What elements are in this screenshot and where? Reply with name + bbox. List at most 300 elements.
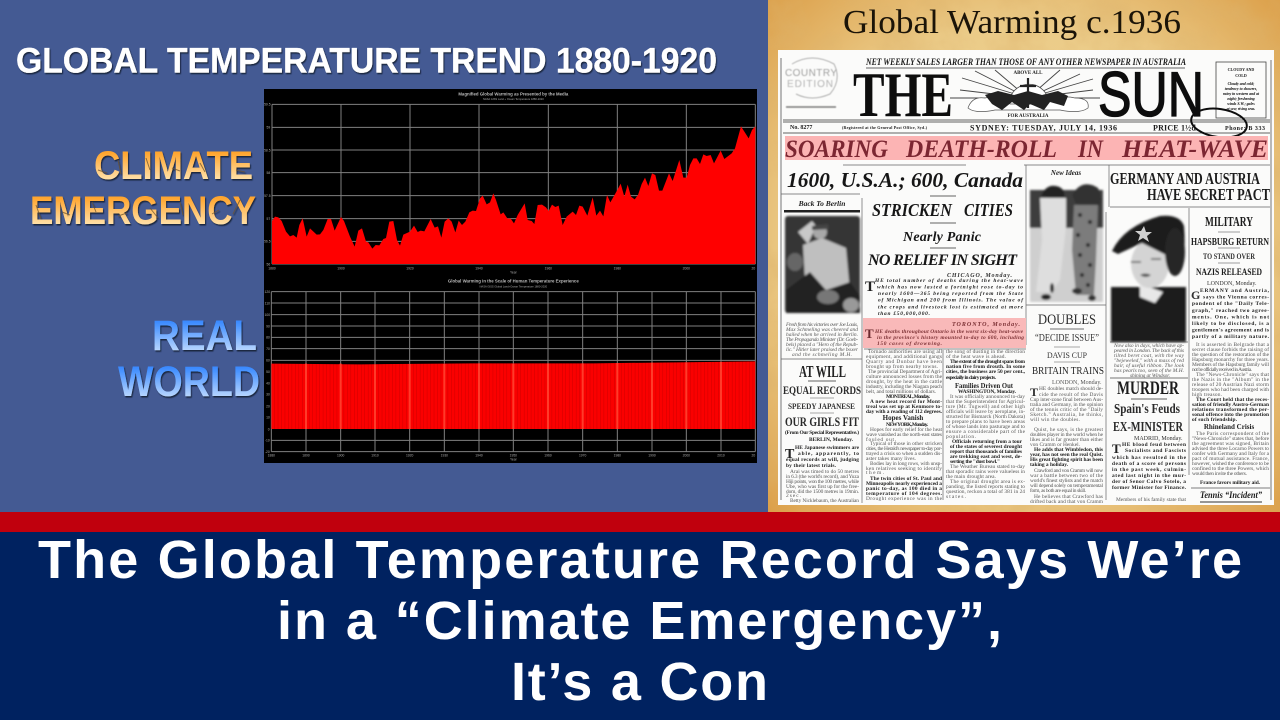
news item: at will equal records: Ube, who was first up for the free- [786,483,859,490]
news item: military hapsburg return: the question of the restoration of the [1192,351,1270,358]
news item: military hapsburg return: secret clause forbids the raising of [1192,346,1269,353]
news column: drought reports: The provincial Department of Agri- [868,368,942,375]
chart title: human scale: NASA GISS Global Land+Ocean Temperature 1880-2020 [480,284,548,288]
news item: military hapsburg return [1191,215,1270,502]
strapline: NET WEEKLY SALES LARGER THAN THOSE OF ANY OTHER NEWSPAPER IN AUSTRALIA [865,57,1186,67]
news column: drought reports: Quarry and Dunbar have been [866,359,942,365]
date line: Phone: B 333 [1225,126,1265,132]
news item: doubles decide issue: BRITAIN TRAINS [1032,366,1104,377]
news item: doubles decide issue: will depend solely on temperamental [1030,483,1104,489]
news item: doubles decide issue: Crawford and von Cramm will now [1034,467,1103,474]
label: real world: REAL [152,312,257,360]
news item: back to berlin photo: bels) placed a "Hero of the Repub- [786,341,858,348]
emblem: sun chariot [950,70,1100,119]
news column: families driven out: cities, the business are 50 per cent., [946,369,1026,375]
news item: military hapsburg return: G [1191,288,1200,302]
news item: stricken cities: T [865,279,875,295]
news item: doubles decide issue [1030,312,1104,505]
news column: drought reports: Drought experience was in the [866,496,943,502]
news item: doubles decide issue: war a battle between two of the [1030,472,1104,479]
axis labels: human scale chart: 2000 [683,454,690,458]
news item: stricken cities: nearly 1600—365 being reported from the State [878,291,1024,297]
news item: doubles decide issue: taking a holiday. [1030,462,1069,468]
news item: at will equal records: 2sec. [786,493,801,499]
news item: military hapsburg return: the agreement was signed, Britain [1192,441,1269,447]
news item: doubles decide issue: of the tennis critic of the "Daily [1030,406,1103,413]
news item: doubles decide issue: Sketch." Australia, he thinks, [1030,412,1104,418]
news item: stricken cities [865,196,1024,317]
news item: at will equal records: T [785,447,795,462]
stamp: country edition [785,58,837,107]
headline: soaring death-roll in heat-wave: IN [1077,136,1104,163]
news column: drought reports: fouled out. [866,436,896,443]
news item: doubles decide issue: will win the doubles. [1030,417,1080,423]
photo: woman in star hat: hair, of useful ribbon. The look [1114,362,1185,369]
chart title: human scale: Global Warming in the Scale of Human Temperature Experience [448,279,579,284]
news item: military hapsburg return: gentlemen's agreement and is [1192,328,1269,334]
axis labels: human scale chart: 90 [266,324,270,328]
news column: drought reports: cities, the Herald's newspaper to-day por- [866,446,942,452]
news item: doubles decide issue: DOUBLES [1038,312,1096,328]
news column: drought reports: Tornado authorities are using all [868,349,942,355]
news column: drought reports: industry, including the Niagara peach [866,384,942,390]
axis labels: magnified chart: 59 [266,126,270,130]
weather box: CLOUDY AND [1228,67,1254,72]
masthead: the sun [781,57,1271,500]
news column: families driven out [946,348,1026,500]
date line: (Registered at the General Post Office, Syd.) [842,125,928,130]
axis labels: human scale chart: 1980 [614,454,621,458]
news column: families driven out: officials will leave by aeroplane, in- [946,408,1025,415]
axis labels: magnified chart: 1960 [545,266,552,270]
news item: doubles decide issue: form, as both are equal in skill. [1030,487,1086,494]
news item: military hapsburg return: of such friendship. [1192,417,1238,423]
photo: woman in star hat: "bejeweled," with a mass of red [1114,357,1184,364]
news item: military hapsburg return: The "News-Chronicle" says that [1196,372,1270,378]
news item: military hapsburg return: LONDON, Monday. [1207,281,1257,287]
circled annotation [1189,105,1249,141]
axis labels: magnified chart: Year [510,271,518,275]
news item: military hapsburg return: high treason. [1192,392,1222,398]
axis labels: magnified chart: 20 [751,266,755,270]
news item: at will equal records: SPEEDY JAPANESE [788,401,855,411]
news item: military hapsburg return: advised the three Locarno Powers to [1192,446,1269,452]
chart title: magnified warming: NASA GISS Land + Ocean Temperature 1880-2020 [483,97,544,101]
news item: military hapsburg return: would then invite the others. [1192,471,1247,477]
photo: woman in star hat: has pearls too, seen of the M.H. [1114,367,1184,374]
axis labels: human scale chart: 1990 [648,454,656,458]
news column: drought reports: Typical of those in other stricken [870,440,942,447]
news column: families driven out: that the Superintendent for Agricul- [946,398,1025,405]
axis labels: magnified chart: 1980 [614,266,621,270]
news item: doubles decide issue: LONDON, Monday. [1052,380,1102,386]
news item: military hapsburg return: graph," reached two agree- [1192,308,1269,314]
panel: global temperature trend background [0,0,768,512]
news item: at will equal records: HE Japanese swimmers are [795,445,860,451]
callout: toronto highlighted paragraph: 150 cases of drowning. [877,341,942,347]
axis labels: magnified chart: 58.5 [264,148,271,152]
news item: military hapsburg return: Hapsburg monarchy for three years. [1192,356,1269,363]
news item: military hapsburg return: Rhineland Crisis [1204,423,1254,431]
weather box: rainy in western and at [1223,92,1260,96]
callout: toronto highlighted paragraph: HE deaths throughout Ontario in the worst six-day heat-wave [874,329,1024,335]
news column: families driven out: that sporadic rains were valueless in [946,469,1025,475]
headline: soaring death-roll in heat-wave: DEATH-ROLL [905,136,1057,163]
news column: families driven out: population. [946,434,976,440]
news item: doubles decide issue: Cup inter-zone final between Aus- [1030,396,1103,403]
news item: military hapsburg return: sation of friendly Austro-German [1192,402,1269,408]
stamp: country edition: COUNTRY [785,68,837,79]
news item: doubles decide issue: von Cramm or Henkel. [1030,442,1080,448]
news column: drought reports: brought up from nearby towns. [866,363,938,370]
news item: murder spain's feuds: in the past week, culmin- [1112,467,1186,473]
axis labels: magnified chart [264,103,755,275]
axis labels: human scale chart: -10 [265,439,270,443]
news column: families driven out: states. [946,494,966,500]
main headline [38,530,1242,712]
axis labels: human scale chart [265,290,755,462]
axis labels: human scale chart: 20 [266,404,270,408]
photo: woman in star hat: shining at Windsor. [1130,373,1170,379]
weather box: tendency to showers, [1225,87,1257,91]
wordmark: SUN: SUN [1098,60,1204,130]
date line [790,124,1265,132]
axis labels: human scale chart: 1950 [510,454,517,458]
title: global temperature trend: GLOBAL TEMPERATURE TREND 1880-1920 [16,42,717,80]
news item: back to berlin photo: Fresh from his victories over Joe Louis, [785,321,859,328]
news item: at will equal records: dom, did the 1500 metres in 19min. [786,489,859,495]
news column: families driven out: structed for Bismarck (North Dakota) [946,413,1025,420]
news column: drought reports: Minneapolis nearly experienced a [866,481,942,487]
news item: at will equal records: Betty Nicklebaum, the Australian [790,498,859,504]
news item: military hapsburg return: likely to be disclosed, is a [1192,321,1269,327]
news item: military hapsburg return: relations transformed the per- [1192,407,1269,413]
heading: global warming c.1936: Global Warming c.1936 [843,4,1181,41]
news column: families driven out: serting the "dust bowl." [950,459,1000,465]
bar series: temperature bars [271,361,755,429]
panel: title banner [0,532,1280,720]
axis labels: magnified chart: 1880 [268,266,276,270]
news item: military hapsburg return: release of 20 Austrian Nazi storm [1192,381,1270,388]
news item: military hapsburg return: MILITARY [1205,215,1253,230]
headline: soaring death-roll in heat-wave [785,136,1268,163]
news column: families driven out: to prepare plans to have been areas [946,419,1025,425]
news column: drought reports: Bodies lay in long rows, with unsp- [870,461,942,467]
news item: doubles decide issue: Quist, he says, is the greatest [1034,427,1104,433]
news item: at will equal records: BERLIN, Monday. [809,437,854,443]
axis labels: human scale chart: 1960 [544,454,552,458]
news column: families driven out: ensure a considerable part of the [946,428,1026,435]
news item: murder spain's feuds [1110,378,1188,503]
news column: drought reports: A new heat record for Mont- [870,399,942,405]
news item: military hapsburg return: TO STAND OVER [1203,252,1255,261]
news item: military hapsburg return: says the Vienna corres- [1203,294,1269,300]
news item: doubles decide issue: DAVIS CUP [1047,350,1087,360]
news column: drought reports: The twin cities of St. Paul and [870,476,942,482]
news item: military hapsburg return: "News-Chronicle" states that, before [1192,435,1270,442]
news column: drought reports: treal was set up at Kenmore to- [866,404,942,410]
news item: stricken cities: the crops and livestock lost is estimated at more [878,304,1024,310]
label: climate emergency: EMERGENCY [30,189,256,233]
news item: back to berlin photo: and the schmeling M.H. [792,352,852,358]
news item: military hapsburg return: ments. One, which is not [1192,314,1269,320]
news item: military hapsburg return: not be officially received in Austria. [1192,366,1252,373]
axis labels: magnified chart: 58 [266,171,270,175]
axis labels: human scale chart: 1970 [579,454,587,458]
news item: doubles decide issue: T [1030,385,1038,399]
news column: drought reports [866,349,943,502]
news item: military hapsburg return: troopers who had been charged with [1192,387,1269,393]
news column: drought reports: Hopes for early relief for the heat [870,426,942,433]
news item: stricken cities: NO RELIEF IN SIGHT [867,252,1018,269]
axis labels: human scale chart: 1910 [371,454,379,458]
news item: military hapsburg return: The Paris correspondent of the [1196,430,1270,437]
news item: murder spain's feuds: Spain's Feuds [1114,402,1180,417]
label: climate emergency: CLIMATE [94,144,253,188]
news column: families driven out: the main drought area. [946,474,996,480]
news item: new ideas photo: New Ideas [1050,169,1081,177]
news item: murder spain's feuds: HE blood feud between [1122,442,1186,448]
news item: doubles decide issue: doubles player in the world when he [1030,432,1104,438]
news column: drought reports: ken relatives seeking to identify [866,465,942,472]
news column: families driven out: Officials returning from a tour [952,439,1023,445]
news item: doubles decide issue: year, has not seen the real Quist. [1030,452,1104,458]
axis labels: human scale chart: 40 [266,381,270,385]
news item: military hapsburg return: pondent of the "Daily Tele- [1192,301,1269,307]
news item: murder spain's feuds: ated last night in the mur- [1112,473,1186,479]
axis labels: human scale chart: 120 [265,290,270,294]
news column: drought reports: them. [866,470,884,476]
news item: doubles decide issue: drifted back and that von Cramm [1030,498,1104,505]
news item: stricken cities: of Michigan and 200 from Illinois. The value of [878,298,1024,304]
axis labels: human scale chart: 70 [266,347,270,351]
news column: families driven out: The Weather Bureau stated to-day [950,464,1025,470]
news item: stricken cities: which has now lasted a fortnight rose to-day to [877,284,1023,290]
axis labels: human scale chart: Year [510,458,518,462]
axis labels: human scale chart: 100 [265,313,270,317]
news column: families driven out: The extent of the drought spans from [950,359,1026,365]
headline: soaring death-roll in heat-wave: HEAT-WAVE [1121,136,1268,163]
date line: No. 8277 [790,125,812,131]
news item: murder spain's feuds: former Minister for Finance. [1112,485,1187,491]
news item: murder spain's feuds: MURDER [1117,378,1179,399]
axis labels: magnified chart: 56 [266,262,270,266]
news item: doubles decide issue: He adds that Wimbledon, this [1034,447,1103,453]
photo: woman in star hat: Now also in days, which have ap- [1113,343,1184,349]
axis labels: magnified chart: 57.5 [264,194,271,198]
photo: woman in star hat: peared in London. The back of this [1113,347,1184,354]
chart title: magnified warming [458,91,569,101]
news item: doubles decide issue: tralia and Germany, in the opinion [1030,402,1103,408]
headline: soaring death-roll in heat-wave: SOARING [785,136,888,163]
callout: toronto highlighted paragraph: in the province's history mounted to-day to 600, including [877,335,1024,341]
news column: families driven out: ture (Mr. Tugwell) and other high [946,403,1025,410]
axis labels: human scale chart: 1930 [441,454,448,458]
axis labels: magnified chart: 59.5 [264,103,271,107]
axis labels: human scale chart: 110 [265,301,270,305]
weather box: COLD [1235,73,1247,78]
news column: drought reports: equipment, and additional gangs [866,354,942,360]
news column: families driven out: of whose lands into pasturage and to [946,423,1025,430]
axis labels: human scale chart: 0 [268,427,270,431]
label: real world [118,312,260,406]
axis labels: human scale chart: 50 [266,370,270,374]
area series: temperature [272,126,755,264]
axis labels: magnified chart: 56.5 [264,240,271,244]
news item: doubles decide issue: likes and is far greater than either [1030,436,1103,443]
news item: military hapsburg return: pact of mutual assistance. France, [1192,455,1270,462]
chart title: magnified warming: Magnified Global Warming as Presented by the Media [458,91,569,96]
news item: at will equal records: equal records at will, judging [786,457,859,463]
news item: murder spain's feuds: T [1112,441,1121,456]
news item: at will equal records: Hiji points, won the 100 metres, while [786,479,860,485]
axis labels: human scale chart: 1880 [268,454,275,458]
subhead: tennis incident: Tennis “Incident” [1200,490,1262,500]
news column: families driven out: Families Driven Out [955,381,1013,390]
news item: back to berlin photo: hailed when he arrived in Berlin. [786,332,858,338]
news column: drought reports: Hopes Vanish [883,414,923,422]
news item: military hapsburg return: the Nazis in the "Album" in the [1192,377,1270,383]
news column: families driven out: The original drought area is ex- [950,479,1025,485]
photo: crowd [785,216,860,313]
axis labels: human scale chart: 1890 [302,454,310,458]
axis labels: magnified chart: 2000 [683,266,690,270]
news item: military hapsburg return: partly of a military nature. [1192,334,1270,340]
weather box: at sea; rising seas. [1227,107,1255,111]
main headline: The Global Temperature Record Says We’re [38,530,1242,590]
news column: drought reports: belt, and total millions of dollars. [866,388,936,395]
subhead: 1600 USA 600 Canada: 1600, U.S.A.; 600, Canada [787,168,1023,192]
axis labels: magnified chart: 1900 [337,266,345,270]
axis labels: human scale chart: 20 [751,454,755,458]
news item: stricken cities: HE total number of deaths during the heat-wave [874,278,1024,284]
stamp: country edition: EDITION [787,79,833,90]
news item: back to berlin photo: Max Schmeling was cheered and [785,327,858,333]
date line: SYDNEY: TUESDAY, JULY 14, 1936 [970,124,1117,132]
news item: doubles decide issue: “DECIDE ISSUE” [1035,333,1099,344]
axis labels: human scale chart: 1920 [406,454,414,458]
news column: drought reports: trayed a crisis so when a sudden dis- [866,451,942,457]
news column: families driven out: of the states of severest drought [950,444,1022,450]
news column: families driven out: are trekking east and west, de- [950,454,1022,460]
news column: families driven out: WASHINGTON, Monday. [958,389,1017,395]
main headline: It’s a Con [511,652,768,712]
news item: at will equal records: able, apparently, to [798,451,859,457]
news column: drought reports: day with a reading of 112 degrees. [866,409,943,415]
news item: new ideas photo [1030,169,1103,302]
news item: military hapsburg return: however, wished the conference to be [1192,460,1270,467]
chart: magnified global warming area chart [264,91,755,275]
news item: at will equal records: EQUAL RECORDS [783,383,861,397]
photo: two women [1030,184,1103,302]
news column: families driven out: the song of dusting in the direction [946,348,1025,355]
axis labels: human scale chart: 1940 [475,454,483,458]
weather box [1216,62,1266,118]
news item: at will equal records: Arai was timed to do 50 metres [790,469,859,475]
weather box: night; freshening [1227,97,1255,101]
divider band: red stripe [0,512,1280,532]
news item: at will equal records: (From Our Special Representative.) [785,429,859,436]
news item: germany and austria headline [1110,169,1270,204]
news item: military hapsburg return: The Court held that the reces- [1196,397,1269,403]
news item: at will equal records: in 6.3 (the world's record), and Yuza [786,473,860,480]
chart: global warming in the scale of human temperature experience [265,279,755,462]
news column: families driven out: panding, the listed reports stating to [946,484,1025,490]
panel: chart backdrop [264,89,757,463]
callout: toronto highlighted paragraph: T [865,326,874,341]
callout: toronto highlighted paragraph: TORONTO, Monday. [952,322,1020,328]
date line: PRICE 1½d. [1153,124,1198,132]
axis labels: human scale chart: 30 [266,393,270,397]
news item: military hapsburg return: confined to the three Powers, which [1192,465,1269,472]
axis labels: human scale chart: 80 [266,336,270,340]
news item: stricken cities: than £50,000,000. [878,311,930,317]
axis labels: magnified chart: 1920 [406,266,414,270]
news item: stricken cities: CHICAGO, Monday. [947,273,1012,279]
news item: murder spain's feuds: which has resulted in the [1112,455,1187,461]
news column: drought reports: temperature of 104 degrees. [866,491,943,497]
axis labels: human scale chart: 60 [266,359,270,363]
news item: military hapsburg return: It is asserted in Belgrade that a [1196,342,1270,348]
news column: drought reports: drought, by the heat in the cattle [866,379,943,385]
news item: military hapsburg return: France favors military aid. [1200,480,1261,486]
news item: back to berlin photo: Back To Berlin [798,199,845,208]
chart title: human scale [448,279,579,288]
news item: murder spain's feuds: Members of his family state that [1116,496,1186,503]
axis labels: human scale chart: 10 [266,416,270,420]
wordmark: THE: THE [853,59,953,130]
axis labels: magnified chart: 1940 [475,266,483,270]
news column: families driven out: question, reckon a total of 381 in 24 [946,488,1025,495]
news column: drought reports: aster takes many lives. [866,456,916,462]
news column: families driven out: nation five from drouth. In some [946,364,1026,370]
axis labels: human scale chart: 2010 [717,454,725,458]
news item: at will equal records: OUR GIRLS FIT [785,415,860,429]
photo: woman in star hat [1111,216,1186,379]
news item: back to berlin photo [784,199,860,358]
weather box: Cloudy and cold; [1228,82,1255,86]
news item: murder spain's feuds: death of a score of persons [1112,461,1186,467]
news item: murder spain's feuds: EX-MINISTER [1113,420,1184,435]
news item: at will equal records: AT WILL [799,362,846,381]
news item: stricken cities: Nearly Panic [902,230,982,245]
news column: drought reports: NEW YORK, Monday. [886,422,929,428]
callout: toronto highlighted paragraph [863,318,1026,348]
weather box: winds S.W.; gales [1227,102,1255,106]
news item: military hapsburg return: NAZIS RELEASED [1196,268,1262,278]
news item: back to berlin photo: lic." Hitler later praised the boxer [786,347,859,353]
axis labels: human scale chart: 1900 [337,454,345,458]
news item: at will equal records: by their latest trials. [786,463,837,469]
emblem: sun chariot: FOR AUSTRALIA [1008,114,1049,119]
news item: doubles decide issue: world's finest stylists and the match [1030,477,1103,484]
news item: military hapsburg return: confer with Germany and Italy for a [1192,450,1270,457]
news item: at will equal records [783,362,861,504]
news item: doubles decide issue: His great fighting spirit has been [1030,457,1103,463]
news item: back to berlin photo: The Propaganda Minister (Dr. Goeb- [786,336,858,343]
news item: doubles decide issue: He believes that Crawford has [1034,493,1103,500]
news item: military hapsburg return: sonal offence into the promotion [1192,412,1269,418]
news column: families driven out: report that thousands of families [950,449,1022,455]
news item: murder spain's feuds: Socialists and Fascists [1125,448,1186,454]
label: climate emergency [30,144,256,233]
news column: families driven out: of the heat wave is ahead. [946,353,1006,360]
news column: drought reports: culture announced losses from the [866,373,943,380]
news item: doubles decide issue: HE doubles match should de- [1039,386,1103,392]
label: real world: WORLD [118,358,260,406]
news item: murder spain's feuds: MADRID, Monday. [1134,436,1183,442]
axis labels: magnified chart: 57 [266,217,270,221]
